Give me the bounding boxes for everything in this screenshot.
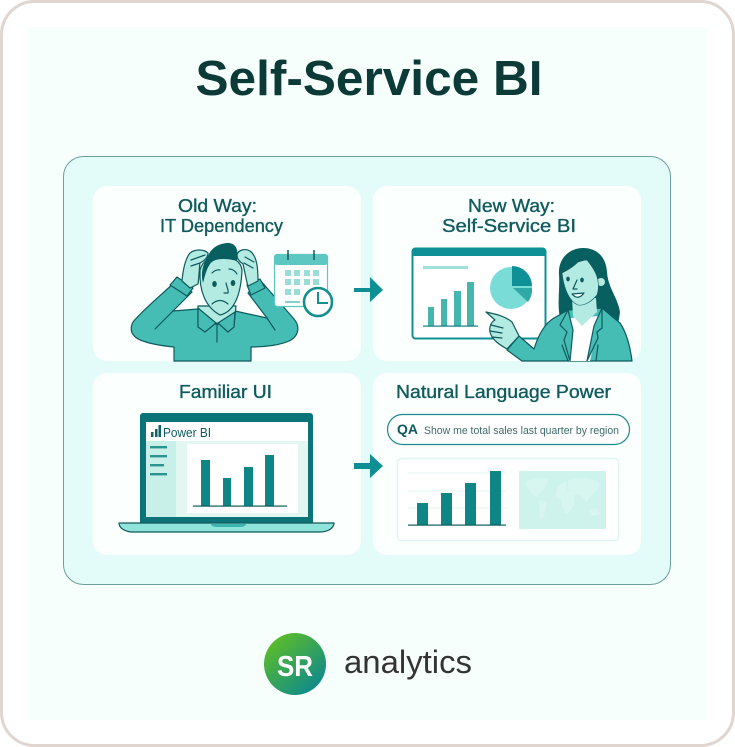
panel: natural language power bbox=[373, 373, 641, 555]
heading: familiar UI: Familiar UI bbox=[179, 382, 272, 402]
heading: new way: Self-Service BI bbox=[442, 216, 576, 236]
icon: presenter woman bbox=[486, 248, 632, 361]
icon: stressed man bbox=[131, 243, 298, 361]
heading: natural language power: Natural Language Power bbox=[396, 382, 611, 402]
heading: new way bbox=[442, 196, 576, 236]
logo: SR analytics: analytics bbox=[344, 644, 472, 680]
bar chart bbox=[408, 471, 506, 526]
dashboard window bbox=[412, 248, 546, 338]
search query pill: Show me total sales last quarter by region bbox=[424, 425, 619, 437]
heading: old way: IT Dependency bbox=[160, 216, 283, 236]
title: Self-Service BI bbox=[196, 52, 542, 106]
panel: new way bbox=[373, 186, 641, 361]
arrow: familiar UI to natural language bbox=[354, 454, 383, 478]
panel: old way bbox=[93, 186, 361, 361]
search query pill: QA bbox=[397, 422, 418, 437]
icon: laptop bbox=[119, 413, 334, 532]
heading: old way bbox=[160, 196, 283, 236]
panel: familiar UI bbox=[93, 373, 361, 555]
power BI logo: Power BI bbox=[163, 425, 211, 440]
bar chart bbox=[423, 282, 478, 327]
icon: calendar with clock bbox=[274, 250, 332, 316]
main panel bbox=[64, 156, 670, 584]
heading: new way: New Way: bbox=[468, 196, 555, 216]
logo: SR analytics bbox=[264, 633, 472, 695]
search query pill bbox=[388, 414, 630, 444]
logo: SR analytics: SR bbox=[277, 651, 313, 683]
results card bbox=[398, 458, 618, 540]
heading: old way: Old Way: bbox=[178, 196, 257, 216]
pie chart bbox=[490, 266, 532, 309]
world map bbox=[519, 471, 606, 529]
arrow: old to new bbox=[354, 277, 383, 302]
bar chart bbox=[193, 455, 287, 507]
